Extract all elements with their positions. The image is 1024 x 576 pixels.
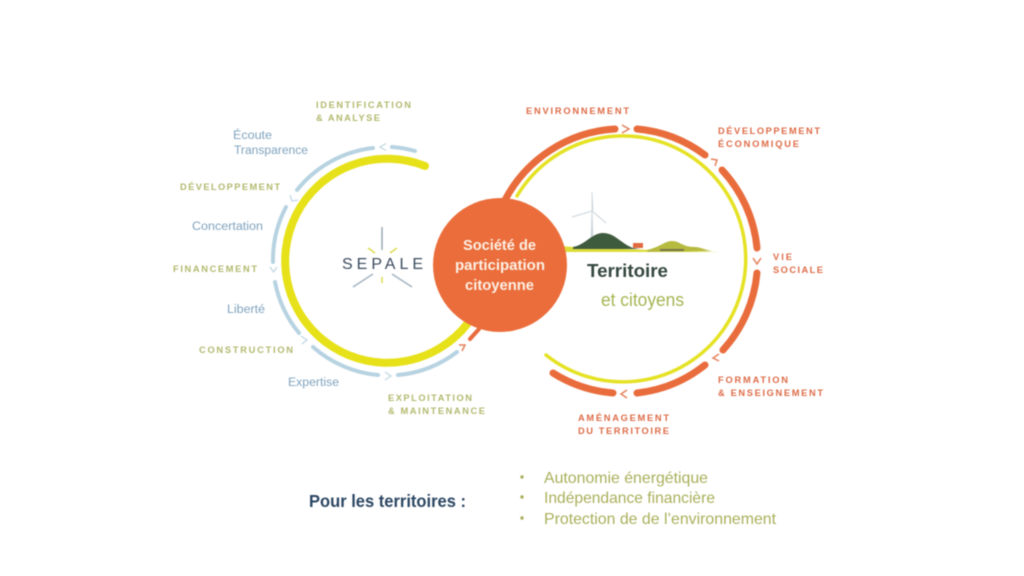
label: vie sociale	[773, 252, 823, 275]
label: environnement: ENVIRONNEMENT	[526, 106, 629, 116]
panel: SEPALE cycle	[173, 100, 485, 416]
illustration: landscape with wind turbine	[560, 192, 720, 252]
label: écoute transparence: Transparence	[234, 145, 308, 157]
blue outer arc segments	[273, 147, 457, 375]
bullet list: benefits: Autonomie énergétique	[544, 470, 708, 487]
yellow thin arc	[517, 136, 746, 382]
label: développement économique: ÉCONOMIQUE	[718, 139, 799, 149]
label: développement économique	[718, 126, 820, 149]
label: vie sociale: VIE	[773, 252, 792, 262]
label: vie sociale: SOCIALE	[773, 265, 823, 275]
label: financement: FINANCEMENT	[173, 264, 257, 274]
label: formation & enseignement: & ENSEIGNEMENT	[718, 388, 823, 398]
label: développement économique: DÉVELOPPEMENT	[718, 126, 820, 136]
label: construction: CONSTRUCTION	[199, 345, 293, 355]
chevron arrows on blue ring	[270, 144, 465, 380]
label: exploitation & maintenance: EXPLOITATION	[388, 393, 472, 403]
orange outer arc segments	[470, 129, 757, 393]
label: territoire: Territoire	[587, 261, 668, 281]
bullet list: benefits	[520, 470, 777, 528]
panel: territoire cycle	[470, 106, 823, 436]
label: expertise: Expertise	[288, 377, 339, 389]
label: identification & analyse	[316, 100, 411, 123]
central circle: société de participation citoyenne	[433, 198, 567, 332]
label: développement: DÉVELOPPEMENT	[180, 182, 280, 192]
bullet list: benefits: Protection de de l’environnement	[544, 511, 777, 528]
label: exploitation & maintenance	[388, 393, 485, 416]
label: formation & enseignement: FORMATION	[718, 375, 788, 385]
label: et citoyens: et citoyens	[601, 290, 684, 310]
label: formation & enseignement	[718, 375, 823, 398]
heading: pour les territoires: Pour les territoires :	[309, 491, 466, 511]
label: exploitation & maintenance: & MAINTENANCE	[388, 406, 485, 416]
yellow thick arc	[285, 159, 468, 363]
bullet list: benefits: Indépendance financière	[544, 490, 715, 507]
label: liberté: Liberté	[227, 304, 265, 316]
central circle: société de participation citoyenne: participation	[455, 257, 545, 274]
label: identification & analyse: & ANALYSE	[316, 113, 380, 123]
central circle: société de participation citoyenne: citoyenne	[465, 277, 534, 294]
label: aménagement du territoire: AMÉNAGEMENT	[578, 413, 669, 423]
chevron arrows on orange ring	[621, 125, 761, 398]
central circle: société de participation citoyenne: Société de	[463, 237, 536, 254]
logo: SEPALE	[342, 227, 423, 287]
label: aménagement du territoire: DU TERRITOIRE	[578, 426, 669, 436]
label: écoute transparence: Écoute	[233, 129, 272, 142]
label: aménagement du territoire	[578, 413, 669, 436]
label: concertation: Concertation	[192, 221, 263, 233]
logo: SEPALE: SEPALE	[342, 256, 423, 273]
label: identification & analyse: IDENTIFICATION	[316, 100, 411, 110]
label: écoute transparence	[233, 129, 308, 157]
